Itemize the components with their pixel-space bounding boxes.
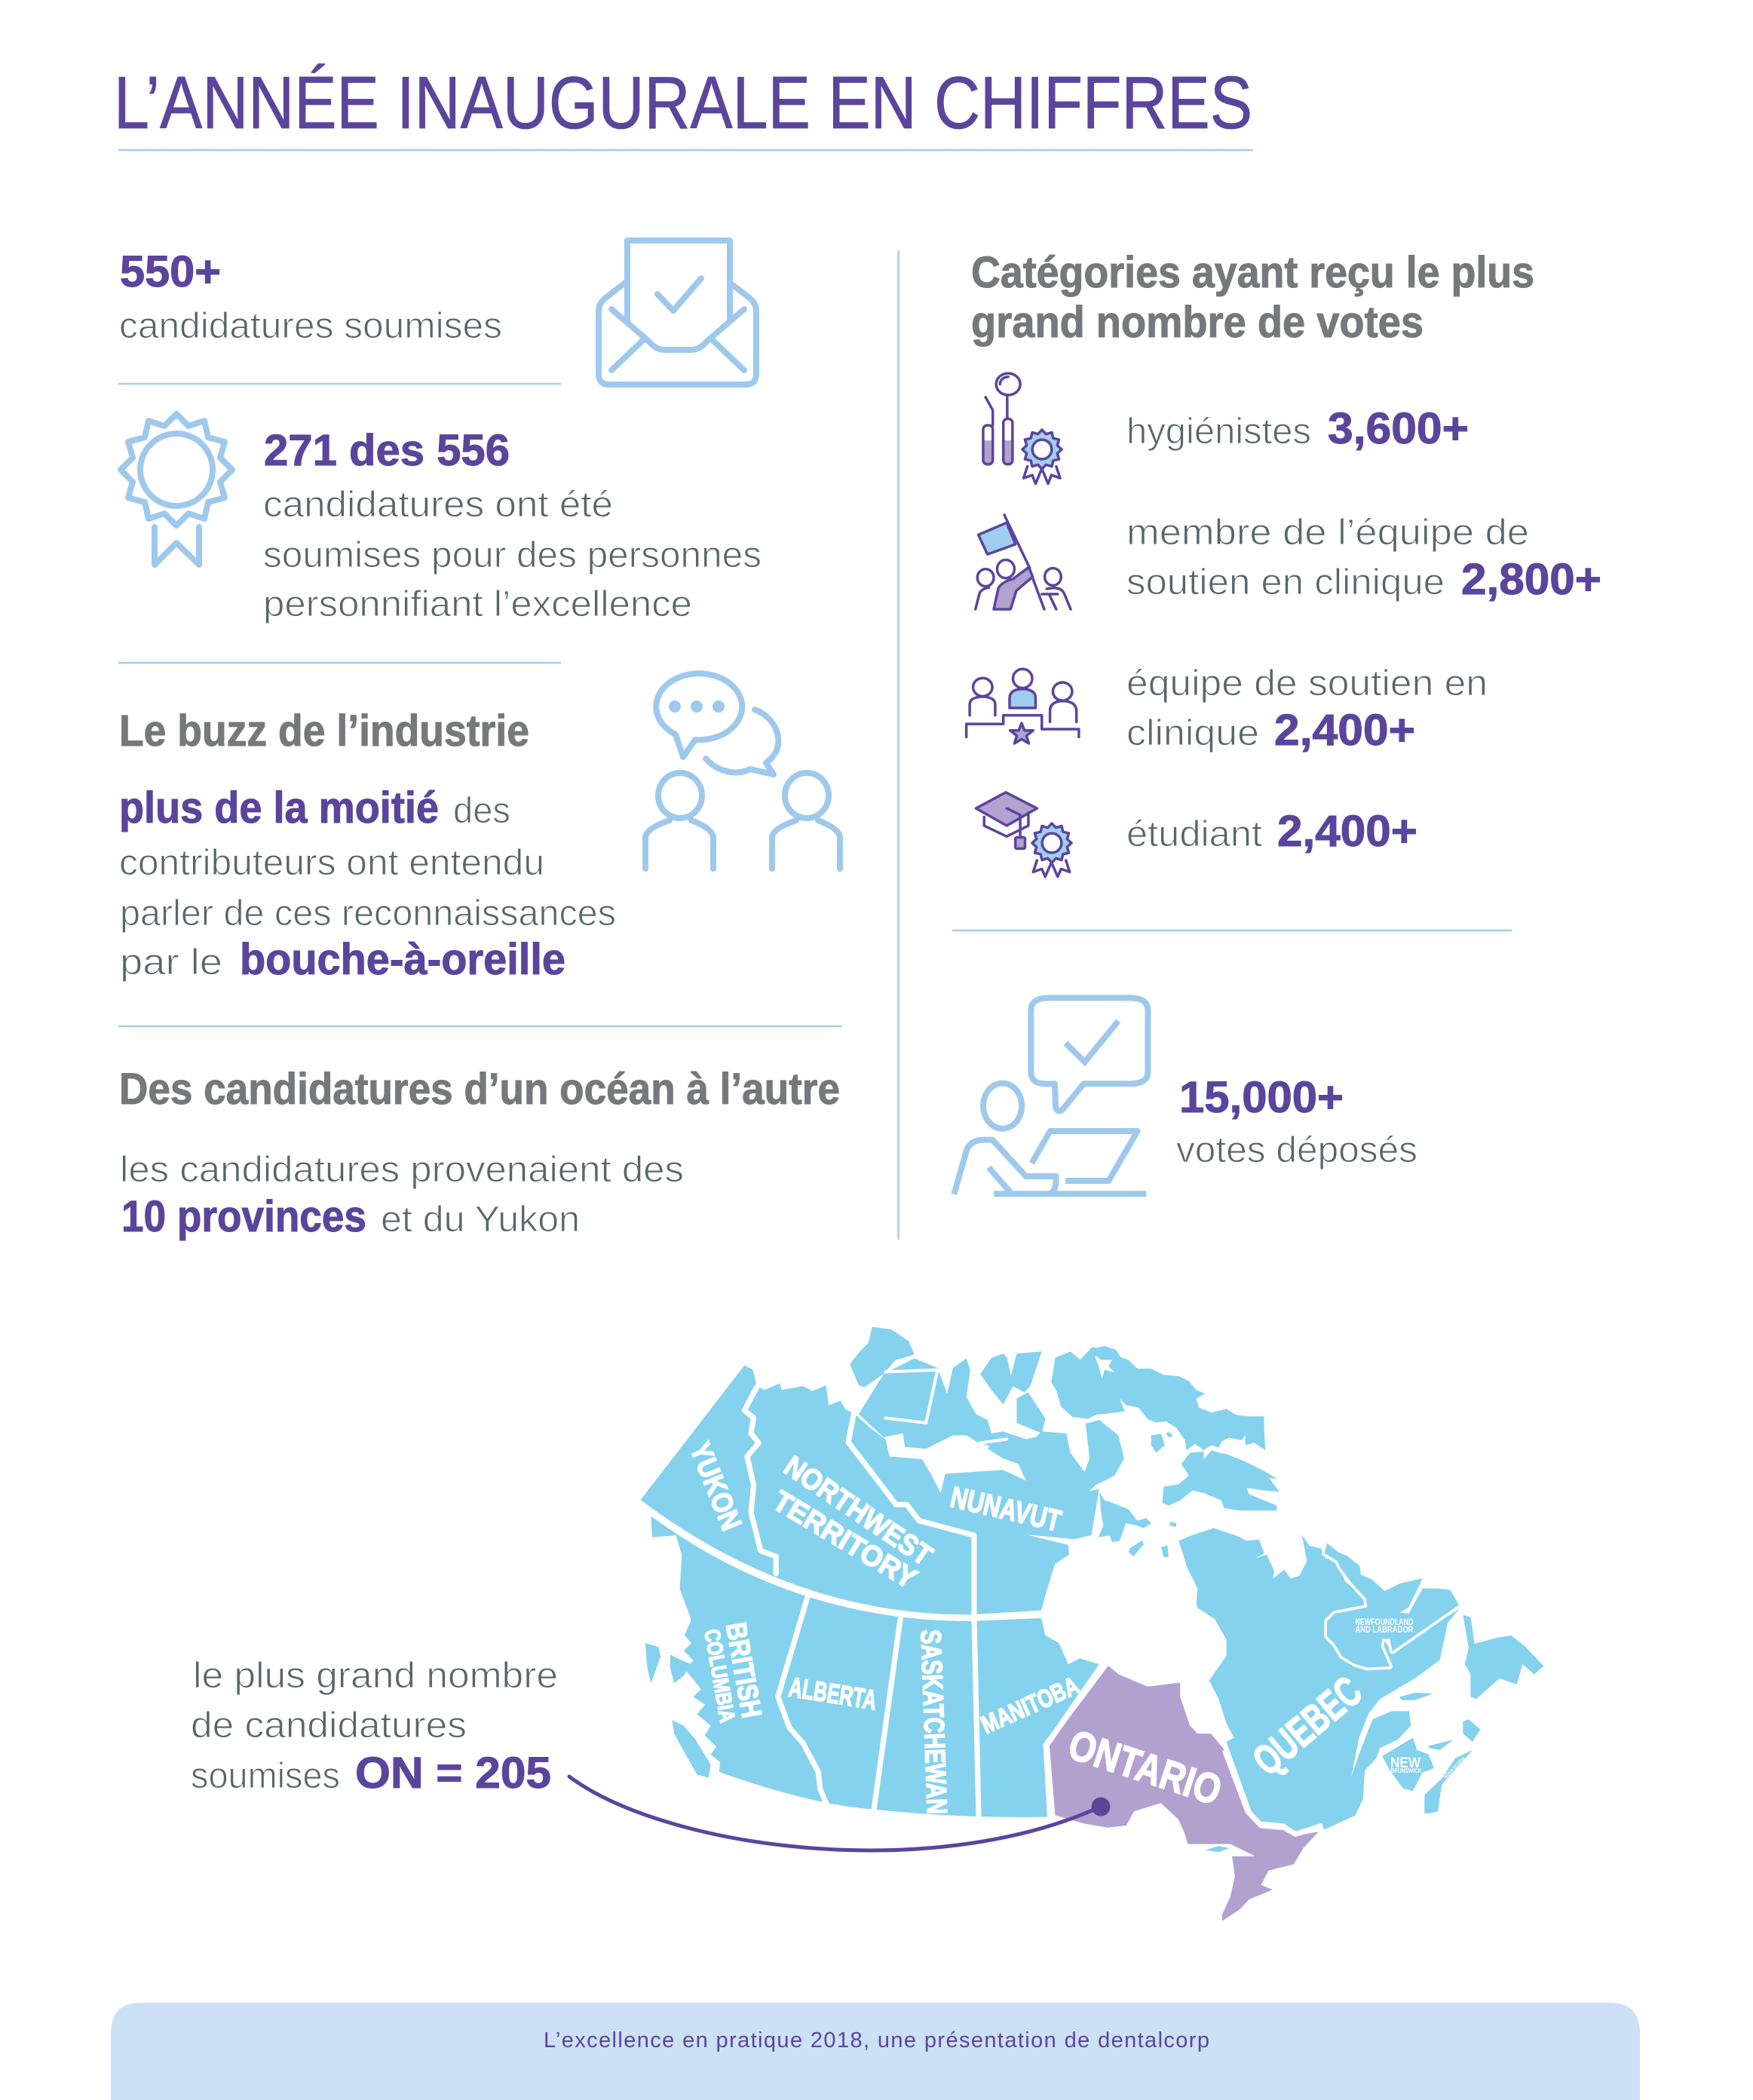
stat: membre de l'équipe: 2,800+ xyxy=(1461,555,1601,604)
footer band: L’excellence en pratique 2018, une présentation de dentalcorp xyxy=(544,2028,1209,2052)
map label: British Columbia xyxy=(699,1620,768,1724)
map label: Alberta: ALBERTA xyxy=(786,1672,879,1715)
icon: two people talking xyxy=(645,673,840,869)
stat: 550+ candidatures: candidatures soumises xyxy=(119,306,502,346)
text block: 10 provinces: 10 provinces xyxy=(121,1192,366,1241)
heading: catégories xyxy=(971,248,1534,347)
icon: podium team xyxy=(967,669,1079,743)
map label: Newfoundland and Labrador: AND LABRADOR xyxy=(1356,1624,1414,1635)
stat: membre de l'équipe: membre de l’équipe de xyxy=(1126,513,1529,553)
map: Ontario highlighted xyxy=(1050,1664,1319,1921)
map label: Yukon: YUKON xyxy=(683,1438,747,1535)
map label: Newfoundland and Labrador: NEWFOUNDLAND xyxy=(1356,1617,1414,1627)
map label: New Brunswick: NEW xyxy=(1390,1755,1420,1771)
stat: 15,000+ votes: 15,000+ xyxy=(1179,1073,1344,1122)
text block: 10 provinces xyxy=(120,1150,684,1241)
map of Canada xyxy=(641,1327,1543,1921)
stat: membre de l'équipe xyxy=(1126,513,1601,604)
stat: étudiant xyxy=(1126,807,1417,856)
stat: 271 des 556: 271 des 556 xyxy=(264,426,510,475)
map label: Newfoundland and Labrador xyxy=(1356,1617,1414,1635)
map label: Manitoba: MANITOBA xyxy=(977,1672,1083,1740)
stat: 271 des 556: personnifiant l’excellence xyxy=(263,584,692,624)
icon: person voting on laptop xyxy=(954,998,1148,1194)
callout: Ontario 205: ON = 205 xyxy=(355,1749,551,1798)
heading: le buzz: Le buzz de l’industrie xyxy=(119,707,529,756)
text block: bouche-à-oreille: bouche-à-oreille xyxy=(240,935,565,984)
callout: Ontario 205: le plus grand nombre xyxy=(193,1656,558,1696)
stat: 15,000+ votes xyxy=(1176,1073,1417,1170)
text block: bouche-à-oreille xyxy=(119,783,616,984)
heading: catégories: grand nombre de votes xyxy=(971,298,1424,347)
map label: Northwest Territory: NORTHWEST xyxy=(778,1450,938,1573)
stat: équipe de soutien: 2,400+ xyxy=(1274,706,1415,755)
stat: équipe de soutien: clinique xyxy=(1126,713,1259,753)
heading: d'un océan à l'autre: Des candidatures d’un océan à l’autre xyxy=(119,1065,840,1114)
map label: Nova Scotia: NOVA SCOTIA xyxy=(1443,1756,1467,1780)
stat: hygiénistes: 3,600+ xyxy=(1328,404,1469,453)
icon: dental tools with rosette xyxy=(983,373,1062,484)
footer band xyxy=(111,2003,1640,2100)
text block: bouche-à-oreille: contributeurs ont entendu xyxy=(119,843,544,883)
text block: bouche-à-oreille: plus de la moitié xyxy=(119,783,439,832)
text block: 10 provinces: les candidatures provenaient des xyxy=(120,1150,684,1190)
stat: 15,000+ votes: votes déposés xyxy=(1176,1130,1417,1170)
stat: 271 des 556: soumises pour des personnes xyxy=(263,535,762,575)
icon: team raising flag xyxy=(976,515,1071,609)
text block: bouche-à-oreille: par le xyxy=(120,943,222,983)
stat: 271 des 556: candidatures ont été xyxy=(263,485,613,525)
stat: 271 des 556 xyxy=(263,426,762,624)
map label: Nunavut: NUNAVUT xyxy=(947,1481,1065,1538)
map label: New Brunswick: BRUNSWICK xyxy=(1390,1767,1422,1774)
text block: bouche-à-oreille: parler de ces reconnaissances xyxy=(120,894,616,934)
map label: Northwest Territory: TERRITORY xyxy=(767,1485,922,1596)
map label: British Columbia: COLUMBIA xyxy=(699,1627,740,1724)
stat: étudiant: étudiant xyxy=(1126,814,1262,854)
map: Baffin, Ellesmere and northern Quebec xyxy=(1093,1346,1366,1644)
icon: envelope with check xyxy=(599,241,756,385)
stat: 550+ candidatures xyxy=(119,247,502,346)
stat: membre de l'équipe: soutien en clinique xyxy=(1126,563,1445,602)
callout: Ontario 205 xyxy=(191,1656,558,1798)
callout: Ontario 205: de candidatures xyxy=(191,1706,467,1746)
stat: étudiant: 2,400+ xyxy=(1277,807,1417,856)
stat: hygiénistes xyxy=(1126,404,1469,453)
text block: bouche-à-oreille: des xyxy=(453,791,510,831)
icon: graduation cap with rosette xyxy=(976,792,1071,877)
map label: Ontario: ONTARIO xyxy=(1063,1720,1227,1814)
icon: award ribbon xyxy=(121,414,232,565)
map: eastern provinces and arctic islands xyxy=(980,1347,1543,1921)
text block: 10 provinces: et du Yukon xyxy=(381,1200,580,1240)
stat: équipe de soutien xyxy=(1126,664,1488,755)
stat: 550+ candidatures: 550+ xyxy=(120,247,221,296)
title: L’ANNÉE INAUGURALE EN CHIFFRES xyxy=(114,61,1252,144)
map: Labrador xyxy=(1325,1544,1459,1668)
map: territory borders xyxy=(744,1370,1007,1818)
map: western provinces and territories xyxy=(641,1327,1124,1818)
stat: hygiénistes: hygiénistes xyxy=(1126,412,1311,452)
map label: Saskatchewan: SASKATCHEWAN xyxy=(915,1629,953,1815)
heading: catégories: Catégories ayant reçu le plus xyxy=(971,248,1534,297)
callout: Ontario 205: soumises xyxy=(191,1756,340,1796)
arrow: callout to Ontario xyxy=(569,1777,1110,1850)
map label: British Columbia: BRITISH xyxy=(720,1620,768,1720)
stat: équipe de soutien: équipe de soutien en xyxy=(1126,664,1488,704)
map label: Quebec: QUEBEC xyxy=(1243,1667,1371,1784)
